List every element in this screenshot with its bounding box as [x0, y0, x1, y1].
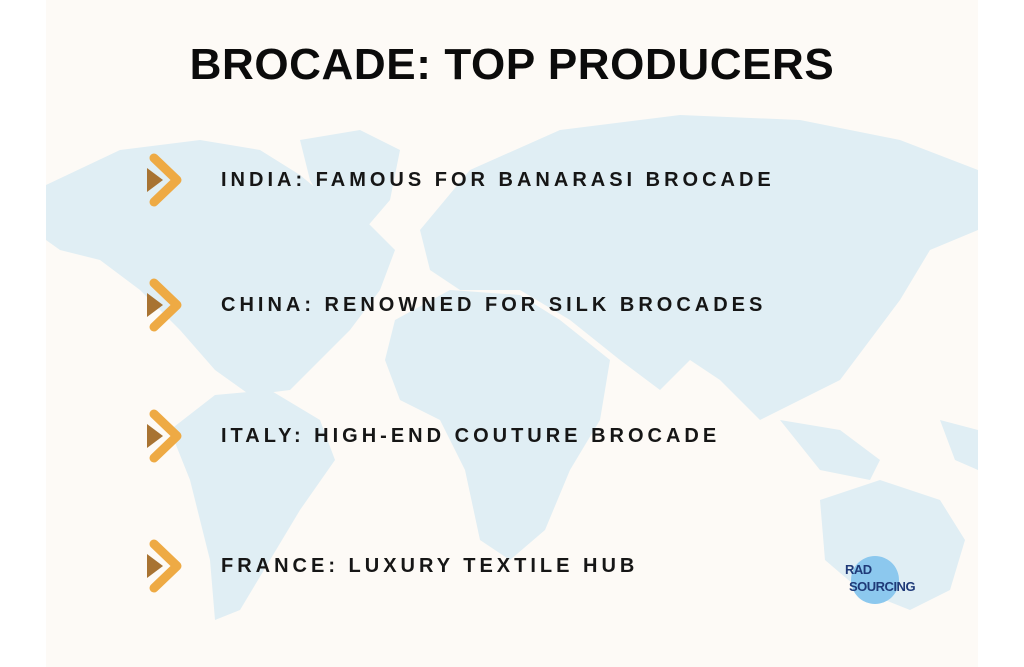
text: ITALY: HIGH-END COUTURE BROCADE — [221, 425, 720, 447]
item 4: France — [147, 540, 638, 592]
text: INDIA: FAMOUS FOR BANARASI BROCADE — [221, 169, 775, 191]
icon: chevron arrow — [147, 540, 182, 592]
text: FRANCE: LUXURY TEXTILE HUB — [221, 555, 638, 577]
item 1: India — [147, 154, 775, 206]
icon: chevron arrow — [147, 410, 182, 462]
item 3: Italy — [147, 410, 720, 462]
text: CHINA: RENOWNED FOR SILK BROCADES — [221, 294, 766, 316]
logo: Rad Sourcing — [845, 556, 915, 604]
item 2: China — [147, 278, 766, 332]
title: BROCADE: TOP PRODUCERS — [190, 40, 834, 89]
icon: chevron arrow — [147, 154, 182, 206]
logo: Rad Sourcing: SOURCING — [849, 579, 915, 594]
icon: chevron arrow — [147, 278, 182, 332]
logo: Rad Sourcing: RAD — [845, 562, 872, 577]
